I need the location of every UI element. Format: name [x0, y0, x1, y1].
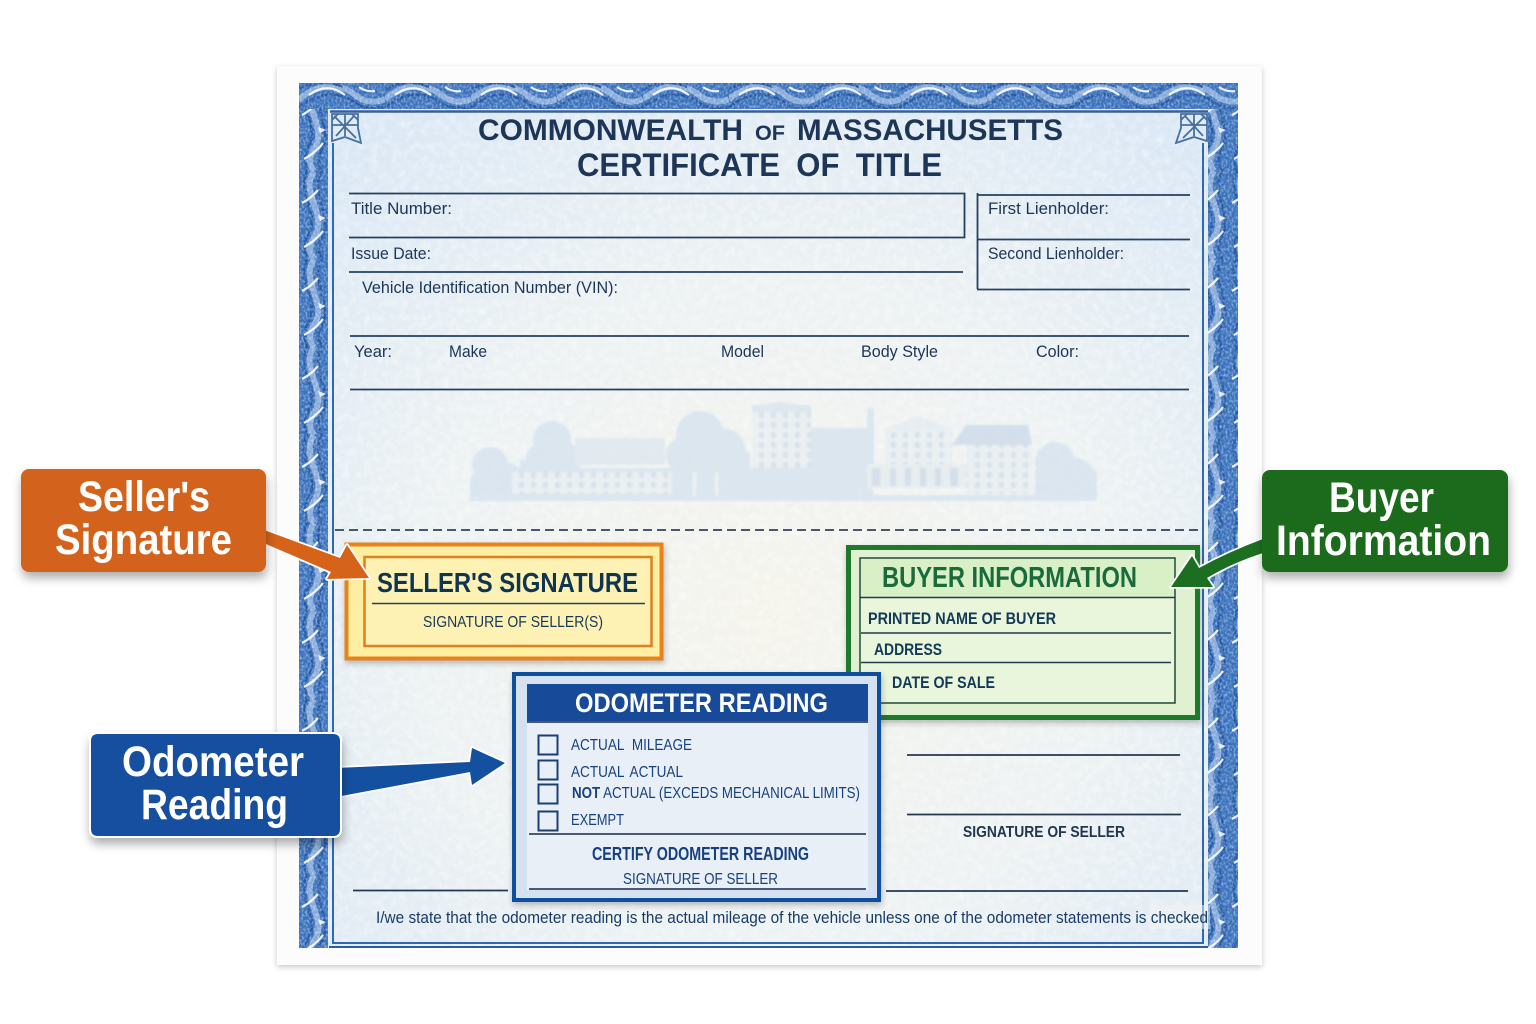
callout: buyer information: Buyer: [1329, 474, 1434, 522]
odometer statement text: I/we state that the odometer reading is the actual mileage of the vehicle unless one of the odometer statements is checked: [376, 908, 1208, 927]
illustration: faint state buildings watermark: [470, 401, 1097, 501]
icon: corner ornament left: [332, 114, 361, 143]
lower right signature lines: [353, 755, 1188, 891]
divider: dashed separation line: [335, 529, 1200, 531]
checkboxes: [538, 736, 558, 830]
callout: seller's signature: Seller's: [78, 473, 210, 521]
panel: buyer information highlight: ADDRESS: [874, 640, 942, 659]
field label: SIGNATURE OF SELLER(S): [423, 614, 603, 631]
title: MASSACHUSETTS: [797, 114, 1063, 147]
arrow: buyer callout to field: [1171, 539, 1263, 587]
lower right signature lines: SIGNATURE OF SELLER: [963, 824, 1125, 841]
panel: odometer reading highlight: SIGNATURE OF SELLER: [623, 871, 778, 888]
form: title and vehicle fields: Color:: [1036, 342, 1079, 361]
title: OF: [755, 122, 785, 145]
panel: odometer reading highlight: [514, 674, 879, 900]
title: [478, 114, 1063, 183]
callout: odometer reading: [90, 733, 341, 837]
form: title and vehicle fields: First Lienholder:: [988, 199, 1109, 218]
panel: buyer information highlight: DATE OF SALE: [892, 673, 995, 692]
panel: certificate paper: [277, 66, 1262, 965]
options: ACTUAL MILEAGE: [571, 737, 692, 754]
form: title and vehicle fields: Title Number:: [351, 199, 452, 218]
inner frame: [329, 112, 1208, 947]
inner border: [364, 557, 652, 646]
panel: seller's signature highlight: [346, 544, 662, 658]
arrow: odometer callout to field: [336, 748, 505, 797]
form: title and vehicle fields: Model: [721, 342, 764, 361]
callout: buyer information: Information: [1276, 517, 1491, 565]
certification: CERTIFY ODOMETER READING: [592, 844, 809, 864]
panel: buyer information highlight: [848, 548, 1198, 718]
callout: seller's signature: Signature: [55, 516, 232, 564]
form: title and vehicle fields: [349, 193, 1190, 390]
callout: odometer reading: Reading: [141, 781, 288, 829]
panel: odometer reading highlight: NOT ACTUAL (EXCEDS MECHANICAL LIMITS): [572, 785, 860, 802]
heading: SELLER'S SIGNATURE: [377, 567, 638, 598]
heading: BUYER INFORMATION: [882, 562, 1137, 594]
panel: odometer reading highlight: ACTUAL ACTUAL: [571, 764, 683, 781]
form: title and vehicle fields: Body Style: [861, 342, 938, 361]
panel: odometer reading highlight: ODOMETER READING: [575, 688, 828, 718]
form: title and vehicle fields: Second Lienholder:: [988, 244, 1124, 263]
form: title and vehicle fields: Issue Date:: [351, 244, 431, 263]
callout: odometer reading: Odometer: [122, 738, 304, 786]
callout: buyer information: [1262, 470, 1508, 572]
form: title and vehicle fields: Vehicle Identification Number (VIN):: [362, 278, 618, 297]
form: title and vehicle fields: Year:: [354, 342, 392, 361]
callout: seller's signature: [21, 469, 266, 572]
decorative guilloche border: [299, 83, 1238, 948]
icon: corner ornament right: [1176, 114, 1207, 143]
title: COMMONWEALTH: [478, 114, 743, 147]
form: title and vehicle fields: Make: [449, 342, 487, 361]
arrow: seller's callout to field: [264, 530, 369, 579]
inner document background: [328, 109, 1208, 948]
panel: odometer reading highlight: EXEMPT: [571, 812, 624, 829]
header bar: [527, 684, 868, 721]
pale patch behind statement end: [1150, 905, 1210, 929]
fields: PRINTED NAME OF BUYER: [868, 609, 1056, 628]
inner table: [860, 558, 1175, 703]
title: CERTIFICATE OF TITLE: [577, 147, 942, 183]
